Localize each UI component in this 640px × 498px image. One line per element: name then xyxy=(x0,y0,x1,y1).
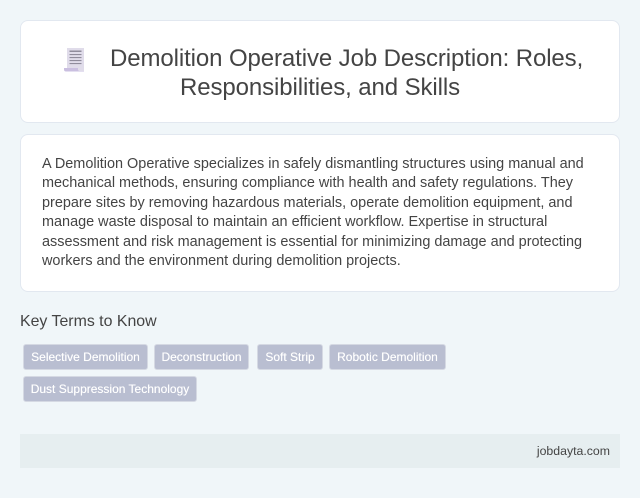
description text xyxy=(42,156,584,269)
tag: Dust Suppression Technology: Dust Suppression Technology xyxy=(31,382,189,396)
title xyxy=(110,45,583,101)
header card xyxy=(20,20,620,123)
tag: Deconstruction xyxy=(154,344,249,370)
section heading: Key Terms to Know xyxy=(20,313,157,330)
description text: mechanical methods, ensuring compliance with health and safety regulations. They xyxy=(42,175,573,191)
tag: Selective Demolition xyxy=(23,344,148,370)
description text: assessment and risk management is essential for minimizing damage and protecting xyxy=(42,234,582,250)
footer bar xyxy=(20,434,620,468)
tag: Deconstruction: Deconstruction xyxy=(161,350,242,364)
description text: A Demolition Operative specializes in safely dismantling structures using manual and xyxy=(42,156,584,172)
description text: workers and the environment during demolition projects. xyxy=(42,253,401,269)
description text: manage waste disposal to maintain an efficient workflow. Expertise in structural xyxy=(42,214,547,230)
footer source: jobdayta.com xyxy=(537,444,610,458)
tag: Soft Strip xyxy=(257,344,323,370)
description text: prepare sites by removing hazardous materials, operate demolition equipment, and xyxy=(42,195,572,211)
description card xyxy=(20,134,620,292)
title: Demolition Operative Job Description: Roles, xyxy=(110,45,583,72)
title: Responsibilities, and Skills xyxy=(180,74,460,101)
icon: document scroll xyxy=(64,48,84,72)
tag: Robotic Demolition xyxy=(329,344,446,370)
tag: Dust Suppression Technology xyxy=(23,376,197,402)
tag: Robotic Demolition: Robotic Demolition xyxy=(337,350,438,364)
tag: Soft Strip: Soft Strip xyxy=(265,350,315,364)
key terms tags xyxy=(23,344,446,402)
tag: Selective Demolition: Selective Demolition xyxy=(31,350,140,364)
